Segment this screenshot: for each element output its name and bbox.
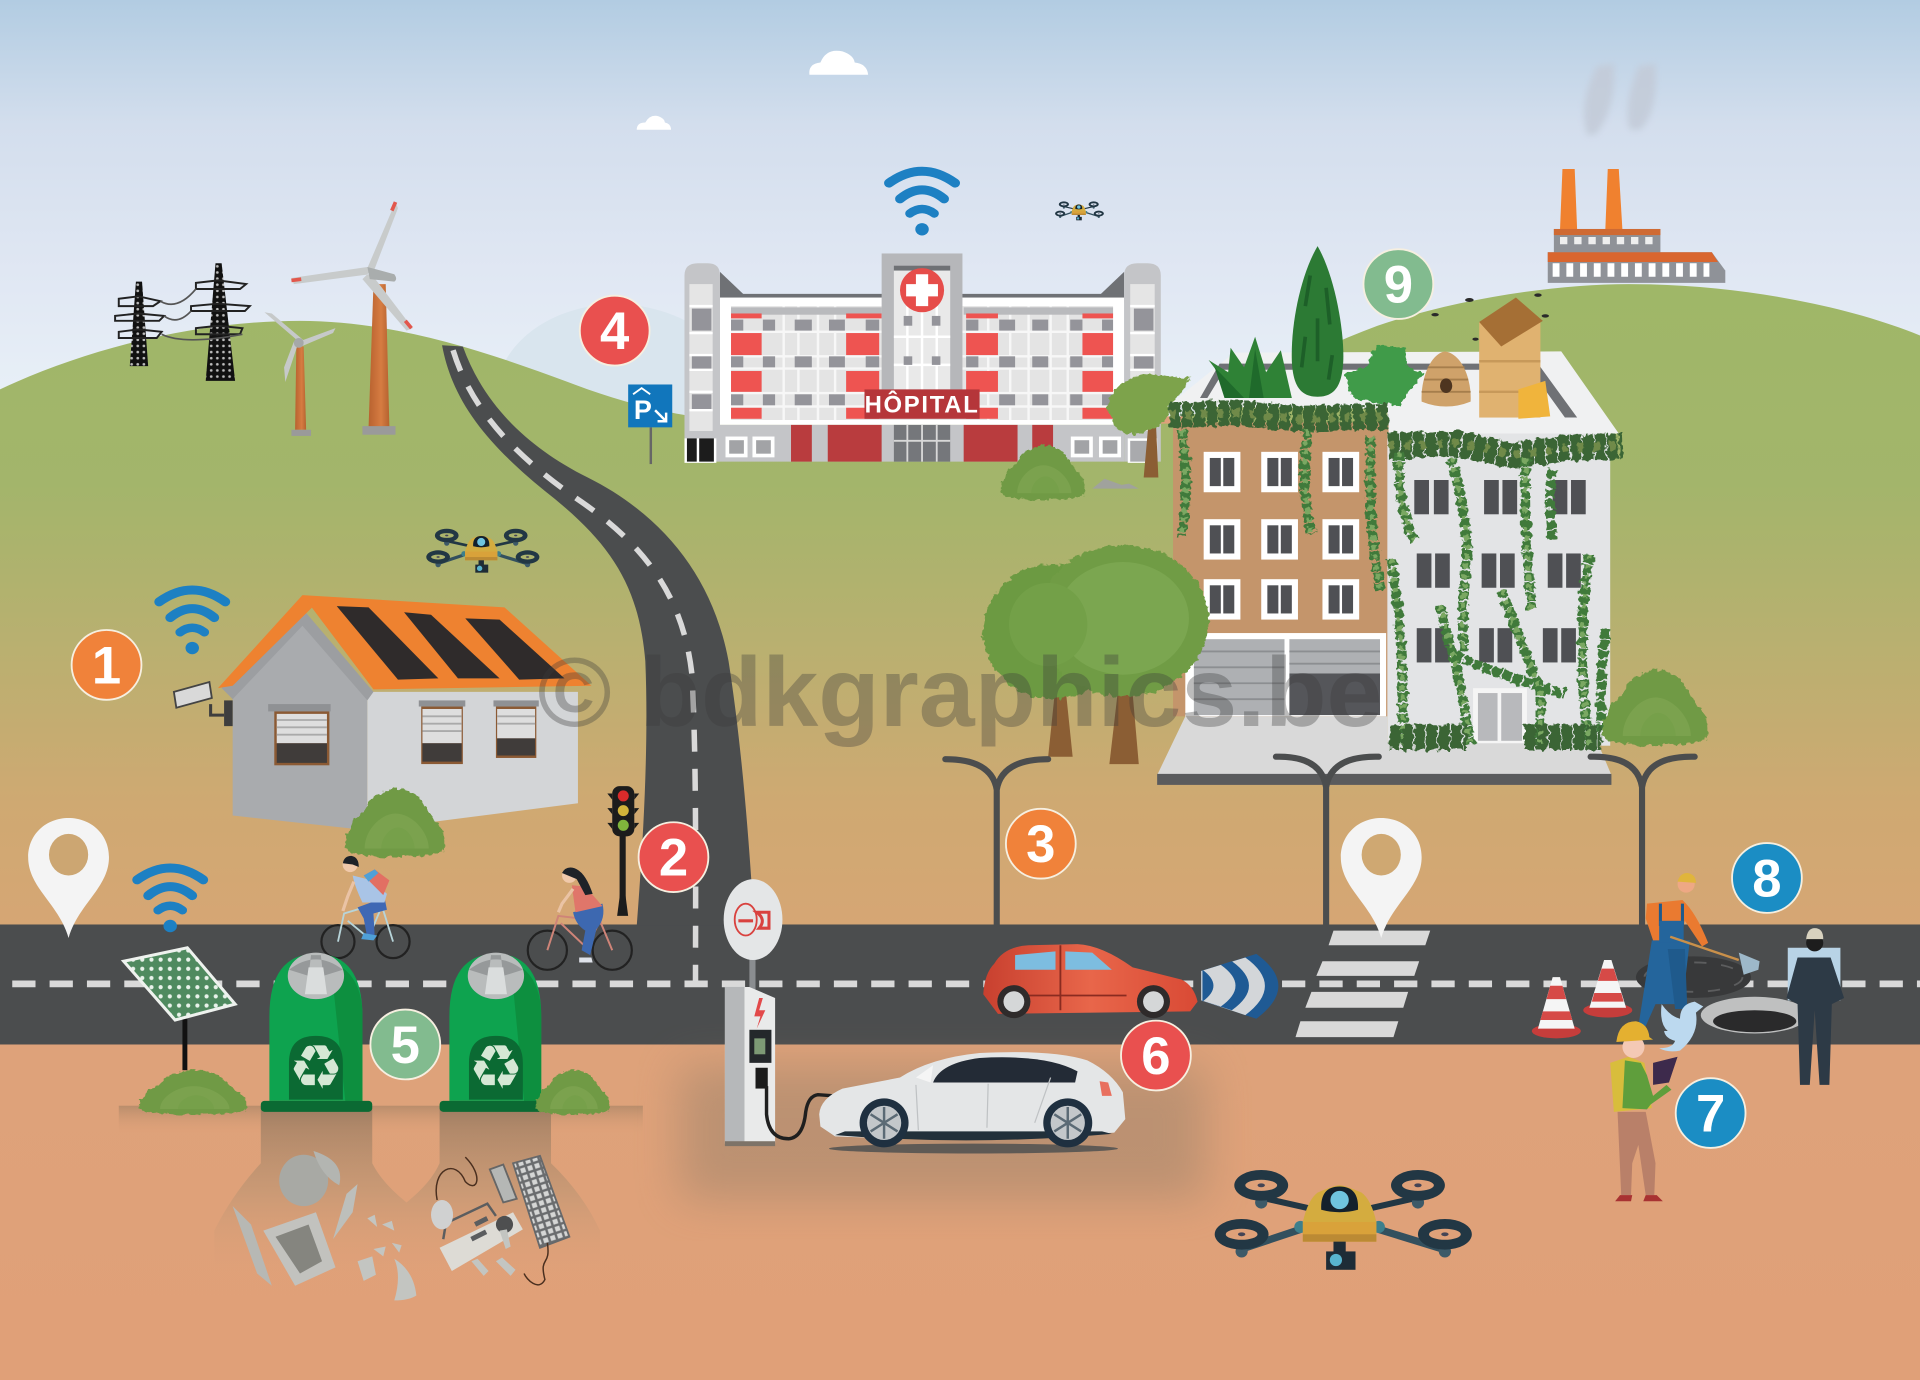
underground waste pits xyxy=(119,1106,643,1273)
ground floor xyxy=(720,425,1124,462)
wind turbine: small xyxy=(264,312,336,436)
badge 6: 6 xyxy=(1141,1027,1171,1086)
badge 3 xyxy=(1006,809,1076,879)
central tower xyxy=(882,253,962,391)
wifi: house xyxy=(159,590,225,654)
badge 7: 7 xyxy=(1696,1084,1725,1143)
sign: HÔPITAL xyxy=(865,391,980,419)
badge 7 xyxy=(1676,1078,1746,1148)
badge 8 xyxy=(1732,843,1802,913)
badge 8: 8 xyxy=(1752,849,1782,908)
green building xyxy=(1157,351,1622,785)
hospital xyxy=(684,253,1161,463)
roof xyxy=(1167,351,1619,436)
power pylons xyxy=(115,263,250,381)
tiny drone xyxy=(1055,201,1104,220)
crosswalk xyxy=(1296,931,1430,1037)
red panels xyxy=(731,313,1113,419)
bush near house xyxy=(346,789,445,857)
watermark: © bdkgraphics.be xyxy=(538,637,1382,747)
plinth xyxy=(1157,716,1611,775)
bees xyxy=(1431,293,1549,341)
traffic light xyxy=(607,786,639,916)
manhole cover xyxy=(1636,956,1751,998)
badge 9: 9 xyxy=(1384,255,1413,314)
recycling bin: right xyxy=(440,953,551,1112)
cyclist: left xyxy=(321,856,410,958)
badge 3: 3 xyxy=(1026,815,1055,874)
left tower xyxy=(684,263,720,462)
inspector with plan xyxy=(1787,928,1844,1085)
badge 5 xyxy=(370,1010,440,1079)
factory xyxy=(1548,64,1725,283)
large drone xyxy=(1215,1170,1472,1270)
badge 9 xyxy=(1363,249,1433,319)
smoke xyxy=(1584,64,1656,135)
glass and ceramic waste xyxy=(233,1151,416,1300)
door xyxy=(1473,688,1527,744)
red car xyxy=(983,944,1198,1018)
charging station xyxy=(724,879,782,1146)
charging cable xyxy=(767,1086,835,1139)
rooftop agave xyxy=(1209,337,1292,398)
cloud: small xyxy=(637,116,671,130)
house xyxy=(218,595,591,830)
sky background xyxy=(0,0,1920,416)
window cell lines xyxy=(731,306,1113,420)
ivy xyxy=(1169,413,1622,744)
signal waves from car xyxy=(1201,954,1278,1019)
location pin: left xyxy=(28,818,109,938)
bushes beside bins xyxy=(140,1070,610,1115)
rooftop cypress xyxy=(1292,246,1343,397)
wifi: solar panel xyxy=(137,868,203,932)
badge 6 xyxy=(1121,1021,1191,1090)
garage xyxy=(1185,633,1386,716)
electronic waste xyxy=(431,1156,569,1285)
brown block xyxy=(1173,422,1389,716)
grey windows xyxy=(731,320,1113,405)
rocks xyxy=(1092,479,1139,489)
white electric car xyxy=(819,1052,1125,1153)
badge 2: 2 xyxy=(659,829,688,888)
badge 1 xyxy=(72,630,141,700)
windows xyxy=(268,700,539,765)
badge 5: 5 xyxy=(391,1016,420,1075)
grey floor bands xyxy=(731,307,882,315)
badge 4 xyxy=(580,296,650,366)
bush near hospital xyxy=(1001,446,1085,500)
open manhole xyxy=(1701,997,1809,1033)
curved road xyxy=(442,345,754,983)
rooftop skep beehive xyxy=(1422,351,1471,407)
wings xyxy=(720,272,747,302)
solar panel xyxy=(124,948,235,1070)
recycling bin: right: ♻ xyxy=(468,1033,523,1104)
traffic cone: near xyxy=(1532,977,1581,1038)
bush near building xyxy=(1603,670,1708,746)
wind turbine: large xyxy=(291,202,413,435)
location pin: crosswalk xyxy=(1341,818,1422,938)
badge 1: 1 xyxy=(92,636,121,695)
red cross emblem xyxy=(900,268,944,312)
horizontal road xyxy=(0,924,1920,1044)
green hills and fading ground xyxy=(0,284,1920,931)
cyclist: right xyxy=(528,868,632,970)
small tree behind building xyxy=(1107,375,1190,478)
white block xyxy=(1387,433,1610,746)
street lights xyxy=(945,757,1695,924)
charging area glow xyxy=(680,1065,1206,1200)
pale distant hill xyxy=(502,304,759,416)
right tower xyxy=(1124,263,1161,462)
security camera xyxy=(174,682,233,726)
twitter bird xyxy=(1659,1002,1703,1051)
cloud: large xyxy=(809,51,868,75)
small drone xyxy=(426,529,539,573)
recycling bin: left xyxy=(261,953,372,1112)
parking sign xyxy=(628,384,672,464)
badge 2 xyxy=(639,822,708,892)
worker with shovel xyxy=(1638,873,1760,1026)
recycling bin: left: ♻ xyxy=(288,1033,343,1104)
traffic cone: far xyxy=(1583,960,1632,1018)
rooftop box beehive xyxy=(1479,298,1550,419)
citizen with phone xyxy=(1610,1021,1678,1201)
soil foreground xyxy=(0,1044,1920,1380)
sign xyxy=(724,879,782,960)
tree pair xyxy=(983,545,1209,764)
badge 4: 4 xyxy=(600,302,629,361)
rooftop lettuce xyxy=(1344,345,1424,407)
solar panels xyxy=(337,606,564,680)
wifi: hospital xyxy=(889,171,955,235)
parking sign: P xyxy=(634,395,652,425)
